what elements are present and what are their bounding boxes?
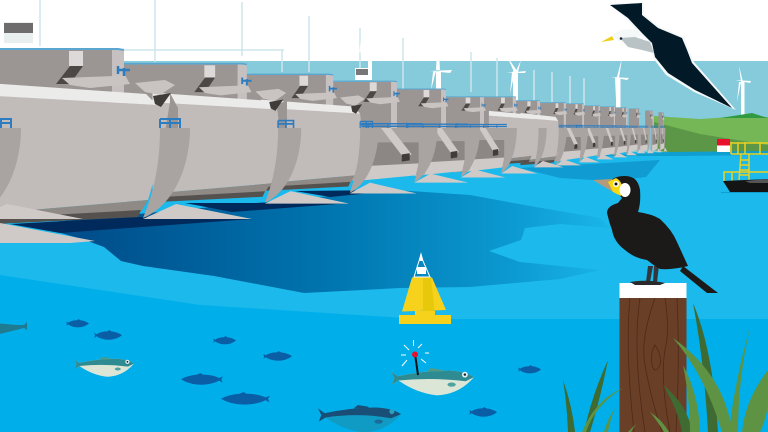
seagull <box>601 3 736 110</box>
far water strip <box>590 151 768 156</box>
distant lamp posts and walkway <box>40 0 584 112</box>
wind turbine 5 <box>735 66 751 116</box>
flag <box>717 139 730 152</box>
buoy <box>399 254 451 324</box>
dark fish <box>318 405 401 432</box>
water surface <box>0 152 768 432</box>
fish at left edge <box>0 322 27 334</box>
distant building left <box>4 22 33 43</box>
wind turbine 1 <box>359 15 381 80</box>
cormorant <box>593 176 718 293</box>
reeds <box>563 303 768 432</box>
nearest pier tip <box>0 223 95 243</box>
pale fish left <box>74 357 134 377</box>
sky <box>0 0 768 61</box>
mooring platform <box>724 142 768 181</box>
wind turbine 2 <box>430 32 452 96</box>
wind turbine 3 <box>506 56 526 101</box>
land <box>654 113 768 153</box>
storm surge barrier <box>0 49 667 224</box>
wind turbine 4 <box>611 58 629 109</box>
distant building <box>355 68 369 80</box>
lower water <box>0 275 768 432</box>
boat <box>721 179 768 193</box>
tagged pale fish <box>391 340 474 395</box>
water shadow of the barrier <box>30 160 660 293</box>
shadow fish <box>66 319 541 417</box>
distant sea <box>0 61 768 161</box>
wooden post <box>620 283 686 432</box>
barrier deep shadows <box>10 190 400 233</box>
